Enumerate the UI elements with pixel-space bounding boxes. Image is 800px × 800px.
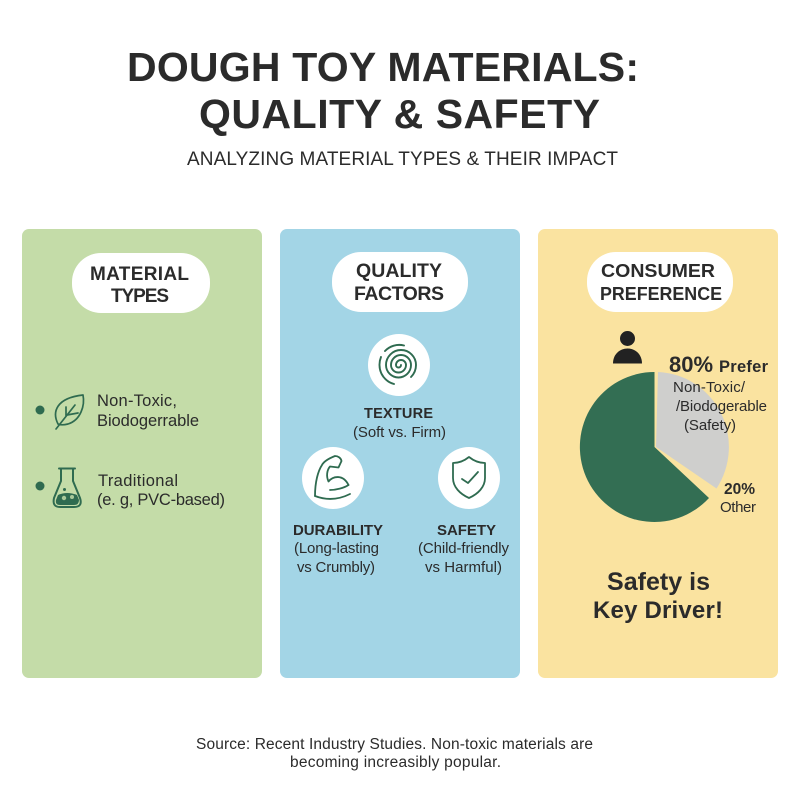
label: 20% other: Other bbox=[720, 499, 756, 516]
title: QUALITY & SAFETY bbox=[199, 91, 600, 137]
source note: becoming increasibly popular. bbox=[290, 754, 501, 771]
subtitle: ANALYZING MATERIAL TYPES & THEIR IMPACT bbox=[187, 149, 618, 170]
heading pill: consumer preference bbox=[587, 252, 733, 312]
title bbox=[127, 44, 639, 137]
label: texture: TEXTURE bbox=[364, 406, 433, 422]
callout: safety is key driver bbox=[593, 568, 723, 624]
icon: texture spiral bbox=[368, 334, 430, 396]
callout: safety is key driver: Safety is bbox=[607, 568, 710, 596]
label: 20% other bbox=[720, 481, 756, 516]
text: non-toxic bbox=[97, 392, 199, 430]
panel: consumer preference bbox=[538, 229, 778, 678]
label: safety: SAFETY bbox=[437, 522, 496, 539]
label: safety bbox=[418, 522, 510, 576]
icon: durability arm bbox=[302, 447, 364, 509]
icon: flask bbox=[54, 468, 81, 507]
callout: safety is key driver: Key Driver! bbox=[593, 597, 723, 624]
label: durability bbox=[293, 522, 383, 576]
label: durability: DURABILITY bbox=[293, 522, 383, 539]
bullet: traditional bbox=[36, 482, 44, 490]
source note: Source: Recent Industry Studies. Non-toxic materials are bbox=[196, 736, 593, 753]
label: 80% prefer: (Safety) bbox=[684, 417, 736, 434]
heading pill: consumer preference: CONSUMER bbox=[601, 260, 715, 281]
title: DOUGH TOY MATERIALS: bbox=[127, 44, 639, 90]
text: traditional bbox=[97, 472, 225, 509]
text: non-toxic: Biodogerrable bbox=[97, 412, 199, 430]
pie chart bbox=[580, 372, 729, 522]
heading pill: quality factors bbox=[332, 252, 468, 312]
text: non-toxic: Non-Toxic, bbox=[97, 392, 177, 410]
label: texture: (Soft vs. Firm) bbox=[353, 424, 446, 441]
label: safety: vs Harmful) bbox=[425, 559, 502, 576]
label: 80% prefer: Non-Toxic/ bbox=[673, 379, 746, 396]
text: traditional: (e. g, PVC-based) bbox=[97, 491, 225, 509]
heading pill: consumer preference: PREFERENCE bbox=[600, 283, 722, 304]
icon: leaf bbox=[56, 395, 83, 429]
label: durability: vs Crumbly) bbox=[297, 559, 375, 576]
heading pill: material types: MATERIAL bbox=[90, 264, 189, 285]
panel: quality factors bbox=[280, 229, 520, 678]
icon: person bbox=[613, 331, 642, 364]
heading pill: quality factors: QUALITY bbox=[356, 260, 442, 282]
label: 80% prefer: /Biodogerable bbox=[676, 398, 767, 415]
label: texture bbox=[353, 406, 446, 441]
label: 80% prefer: 80% bbox=[669, 352, 713, 377]
label: 20% other: 20% bbox=[724, 481, 755, 498]
bullet: non-toxic bbox=[36, 406, 44, 414]
label: durability: (Long-lasting bbox=[294, 540, 379, 557]
text: traditional: Traditional bbox=[98, 472, 178, 490]
heading pill: quality factors: FACTORS bbox=[354, 283, 444, 305]
heading pill: material types: TYPES bbox=[111, 286, 169, 307]
label: 80% prefer bbox=[669, 352, 769, 434]
label: 80% prefer: Prefer bbox=[719, 358, 769, 376]
panel: material types bbox=[22, 229, 262, 678]
source note bbox=[196, 736, 593, 771]
heading pill: material types bbox=[72, 253, 210, 313]
label: safety: (Child-friendly bbox=[418, 540, 510, 557]
icon: safety shield bbox=[438, 447, 500, 509]
